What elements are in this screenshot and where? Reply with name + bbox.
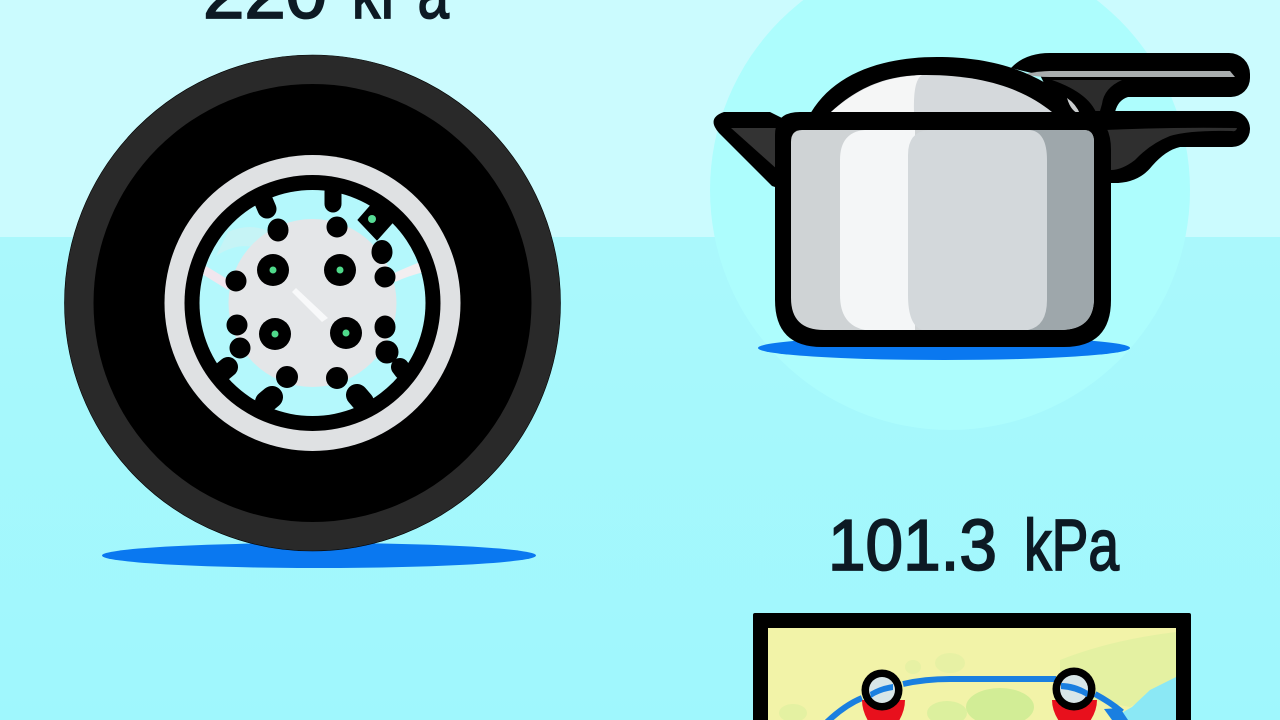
map surface (768, 628, 1176, 720)
label: atmospheric pressure: 101.3 (828, 506, 997, 586)
tire shadow (102, 543, 536, 568)
tire inner black (94, 84, 532, 522)
rim inner ring (184, 175, 440, 431)
body mid tone (908, 130, 1047, 330)
body right shade (1028, 130, 1094, 330)
lid dome (790, 57, 1095, 130)
icon: pressure cooker (714, 53, 1250, 360)
hub and spokes (202, 219, 424, 387)
wheel bolts (257, 254, 362, 350)
lid rim glint (1067, 98, 1080, 114)
cooker body (775, 112, 1111, 347)
left map pin (862, 670, 905, 720)
tire sidewall (64, 55, 560, 551)
right map pin (1052, 668, 1097, 720)
map panel (753, 613, 1191, 720)
icon: car tire (64, 55, 560, 568)
wheel opening (200, 190, 426, 416)
valve green dot (368, 215, 376, 223)
upper handle highlight (1024, 71, 1235, 77)
label: atmospheric pressure (828, 506, 1120, 586)
route end marks (1104, 708, 1128, 720)
background: lower band (0, 237, 1280, 720)
spoke clips (222, 192, 403, 402)
left spout handle (714, 112, 790, 192)
label: atmospheric pressure: kPa (1024, 506, 1120, 586)
wheel rim (164, 155, 460, 451)
map frame (753, 613, 1191, 720)
cooker shadow (758, 336, 1130, 360)
background: halo behind pressure cooker (710, 0, 1190, 430)
background: upper pale band (0, 0, 1280, 237)
lower handle (1090, 111, 1250, 183)
body highlight (840, 130, 915, 330)
travel route (827, 679, 1122, 720)
label: tire pressure (203, 0, 450, 34)
upper handle (1011, 53, 1250, 120)
